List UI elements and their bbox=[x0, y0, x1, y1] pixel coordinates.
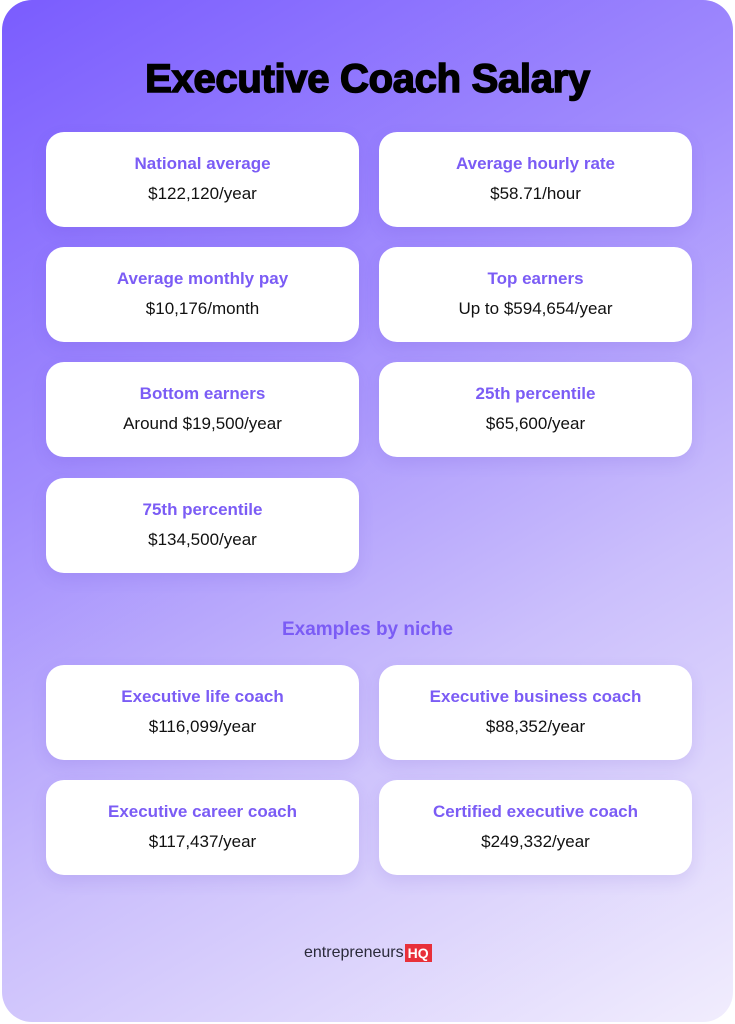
card: top earners bbox=[379, 247, 692, 342]
card: monthly pay: $10,176/month bbox=[146, 299, 259, 318]
card: top earners: Up to $594,654/year bbox=[458, 299, 613, 318]
card: executive career coach: Executive career coach bbox=[108, 802, 297, 821]
logo: HQ bbox=[408, 945, 429, 961]
card: 25th percentile: $65,600/year bbox=[486, 414, 585, 433]
card: national average: National average bbox=[134, 154, 271, 173]
title: Executive Coach Salary bbox=[145, 57, 590, 101]
card: bottom earners bbox=[46, 362, 359, 457]
card: executive life coach bbox=[46, 665, 359, 760]
logo: entrepreneurs bbox=[304, 944, 404, 961]
card: executive business coach: $88,352/year bbox=[486, 717, 585, 736]
subheading: examples by niche: Examples by niche bbox=[282, 619, 453, 640]
card: bottom earners: Bottom earners bbox=[140, 384, 265, 403]
card: bottom earners: Around $19,500/year bbox=[123, 414, 282, 433]
card: hourly rate bbox=[379, 132, 692, 227]
card: executive career coach bbox=[46, 780, 359, 875]
card: executive career coach: $117,437/year bbox=[149, 832, 256, 851]
card: hourly rate: $58.71/hour bbox=[490, 184, 581, 203]
card: top earners: Top earners bbox=[487, 269, 584, 288]
card: executive business coach bbox=[379, 665, 692, 760]
card: 75th percentile: $134,500/year bbox=[148, 530, 257, 549]
card: hourly rate: Average hourly rate bbox=[456, 154, 615, 173]
card: executive life coach: $116,099/year bbox=[149, 717, 256, 736]
card: certified executive coach: $249,332/year bbox=[481, 832, 590, 851]
card: executive life coach: Executive life coach bbox=[121, 687, 284, 706]
card: 25th percentile: 25th percentile bbox=[476, 384, 596, 403]
card: national average: $122,120/year bbox=[148, 184, 257, 203]
card: monthly pay: Average monthly pay bbox=[117, 269, 288, 288]
card: 75th percentile bbox=[46, 478, 359, 573]
card: executive business coach: Executive business coach bbox=[430, 687, 641, 706]
card: 75th percentile: 75th percentile bbox=[142, 500, 262, 519]
card: 25th percentile bbox=[379, 362, 692, 457]
card: certified executive coach: Certified executive coach bbox=[433, 802, 638, 821]
card: monthly pay bbox=[46, 247, 359, 342]
card: national average bbox=[46, 132, 359, 227]
card: certified executive coach bbox=[379, 780, 692, 875]
